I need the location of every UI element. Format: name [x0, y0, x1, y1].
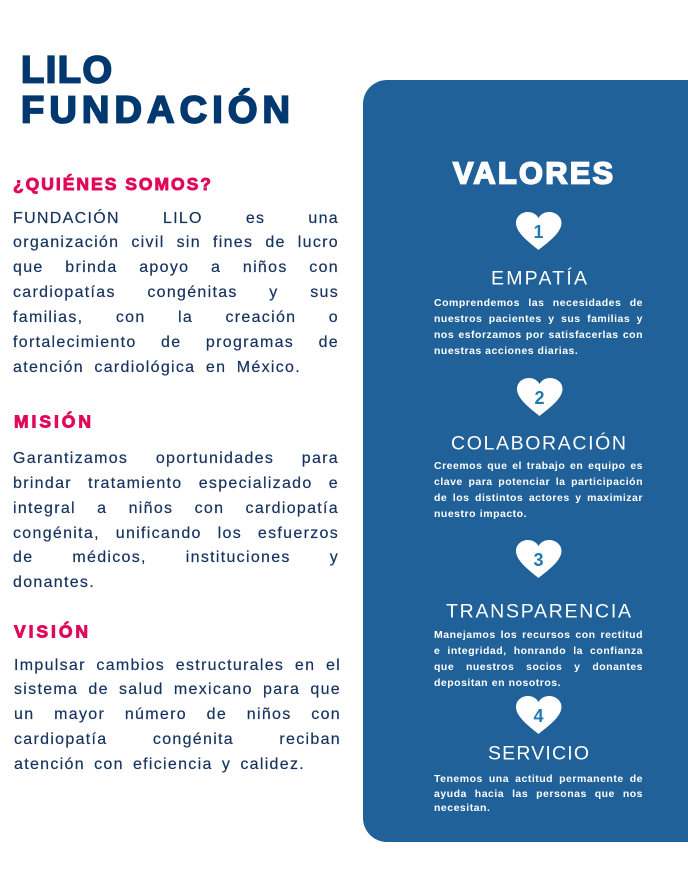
text block: misión: integral a niños con cardiopatía — [13, 500, 339, 517]
title: LILO — [21, 50, 112, 92]
text block: quiénes somos: FUNDACIÓN LILO es una — [13, 210, 339, 226]
text block: quiénes somos: familias, con la creación o — [13, 309, 339, 326]
text block: colaboración: de los distintos actores y maximizar — [434, 492, 643, 504]
text block: transparencia: e integridad, honrando la confianza — [434, 644, 643, 656]
heading: transparencia: TRANSPARENCIA — [446, 600, 631, 622]
text block: colaboración: Creemos que el trabajo en equipo es — [434, 460, 643, 472]
text block: quiénes somos: organización civil sin fines de lucro — [13, 234, 339, 251]
text block: colaboración: clave para potenciar la participación — [434, 476, 643, 488]
text block: misión: Garantizamos oportunidades para — [13, 450, 339, 467]
text block: quiénes somos — [13, 209, 339, 376]
text block: visión — [14, 656, 341, 773]
text block: empatía: nos esforzamos por satisfacerlas con — [434, 329, 643, 341]
text block: visión: atención con eficiencia y calidez. — [14, 756, 305, 773]
text block: quiénes somos: cardiopatías congénitas y sus — [13, 284, 339, 301]
text block: transparencia: que nuestros socios y donantes — [434, 660, 643, 672]
heading: servicio: SERVICIO — [488, 742, 589, 764]
text block: servicio: necesitan. — [434, 802, 490, 814]
text block: quiénes somos: atención cardiológica en México. — [13, 359, 301, 376]
heading: empatía: EMPATÍA — [491, 266, 587, 290]
text block: visión: Impulsar cambios estructurales en el — [14, 656, 341, 674]
title: FUNDACIÓN — [21, 88, 290, 132]
text block: empatía: Comprendemos las necesidades de — [434, 297, 643, 309]
text block: servicio: Tenemos una actitud permanente de — [434, 773, 643, 785]
heading: visión: VISIÓN — [14, 620, 88, 642]
text block: quiénes somos: fortalecimiento de programas de — [13, 334, 339, 351]
text block: transparencia: depositan en nosotros. — [434, 676, 561, 688]
title — [21, 50, 290, 132]
text block: misión: congénita, unificando los esfuerzos — [13, 525, 339, 542]
icon: heart 1: 1 — [533, 222, 544, 242]
text block: misión: brindar tratamiento especializado e — [13, 475, 339, 492]
text block: colaboración — [434, 460, 643, 520]
text block: transparencia — [434, 628, 643, 688]
text block: servicio: ayuda hacia las personas que nos — [434, 788, 643, 800]
heading: valores: VALORES — [453, 156, 613, 190]
text block: misión — [13, 450, 339, 591]
text block: visión: un mayor número de niños con — [14, 706, 341, 723]
icon: heart 2: 2 — [534, 388, 545, 408]
heading: misión: MISIÓN — [14, 410, 91, 432]
text block: misión: donantes. — [13, 574, 95, 591]
text block: visión: cardiopatía congénita reciban — [14, 731, 341, 748]
text block: quiénes somos: que brinda apoyo a niños con — [13, 259, 339, 276]
text block: servicio — [434, 773, 643, 814]
icon: heart 3: 3 — [533, 550, 544, 570]
text block: colaboración: nuestro impacto. — [434, 508, 527, 520]
text block: empatía — [434, 297, 643, 357]
heading: colaboración: COLABORACIÓN — [451, 432, 626, 454]
icon: heart 4: 4 — [533, 706, 544, 726]
text block: empatía: nuestros pacientes y sus familias y — [434, 313, 643, 325]
text block: empatía: nuestras acciones diarias. — [434, 345, 578, 357]
text block: misión: de médicos, instituciones y — [13, 549, 339, 566]
panel: valores background — [363, 80, 688, 842]
text block: transparencia: Manejamos los recursos con rectitud — [434, 628, 643, 640]
text block: visión: sistema de salud mexicano para que — [14, 681, 341, 698]
heading: quiénes somos: ¿QUIÉNES SOMOS? — [13, 173, 211, 194]
